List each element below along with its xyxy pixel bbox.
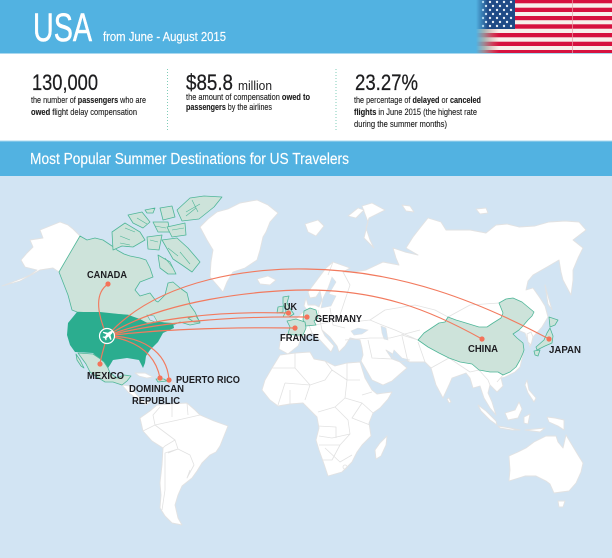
label: Puerto Rico: PUERTO RICO	[176, 375, 240, 386]
stat: delayed or canceled flights: 23.27%	[355, 70, 418, 95]
map: UK and Ireland	[277, 296, 294, 317]
stat: delayed or canceled flights: during the summer months)	[354, 119, 447, 129]
stat: passengers owed compensation: the number of passengers who are	[31, 95, 146, 105]
map: African borders	[272, 353, 373, 462]
icon: US flag	[476, 0, 612, 53]
map: Australia	[509, 435, 583, 507]
map: Africa	[262, 352, 392, 476]
world map	[0, 176, 612, 558]
map: Central America and Caribbean	[122, 373, 175, 405]
header band	[0, 0, 612, 54]
section heading band: Most Popular Summer Destinations for US Travelers	[30, 151, 349, 168]
map: Germany	[303, 308, 318, 326]
stat: passengers owed compensation: 130,000	[32, 70, 98, 95]
map: Japan	[534, 317, 558, 356]
title: USA: USA	[33, 6, 92, 50]
stat: passengers owed compensation	[31, 70, 146, 117]
map: China	[418, 298, 534, 375]
section heading band	[0, 140, 612, 176]
stat: compensation amount: $85.8	[186, 70, 233, 95]
stat: delayed or canceled flights: the percentage of delayed or canceled	[354, 95, 481, 105]
label: France: FRANCE	[280, 333, 319, 344]
map: Hispaniola and Puerto Rico	[156, 379, 167, 382]
map: France	[287, 319, 306, 335]
stat: delayed or canceled flights	[354, 70, 481, 129]
map: South-East Asian islands	[478, 380, 564, 432]
stat: compensation amount: million	[238, 78, 272, 93]
label: Japan: JAPAN	[549, 345, 581, 356]
destination markers	[97, 281, 552, 383]
divider	[335, 69, 337, 131]
map: Eurasia	[279, 203, 586, 415]
map: Greenland and Iceland	[200, 200, 278, 292]
label: China: CHINA	[468, 344, 498, 355]
divider	[166, 69, 168, 131]
label: Mexico: MEXICO	[87, 371, 124, 382]
subtitle: date range: from June - August 2015	[103, 29, 226, 44]
map: Alaska	[2, 222, 80, 300]
map: USA	[67, 312, 174, 368]
icon: airplane hub	[100, 328, 114, 344]
map: Mexico	[76, 353, 131, 385]
stat: compensation amount: passengers by the airlines	[186, 102, 272, 112]
map: Canada	[59, 196, 222, 325]
label: Germany: GERMANY	[315, 314, 362, 325]
label: Dominican Republic	[129, 384, 184, 407]
map: Eurasian borders	[285, 262, 503, 385]
label: Dominican Republic: DOMINICAN	[129, 384, 184, 395]
map: inland seas	[351, 328, 368, 335]
flight arcs	[99, 269, 549, 380]
stat: passengers owed compensation: owed flight delay compensation	[31, 107, 137, 117]
map: Great Lakes	[147, 315, 158, 323]
stat: compensation amount: the amount of compensation owed to	[186, 92, 310, 102]
stat: delayed or canceled flights: flights in June 2015 (the highest rate	[354, 107, 477, 117]
label: Canada: CANADA	[87, 270, 127, 281]
map: South America	[140, 403, 228, 525]
label: UK: UK	[284, 302, 298, 313]
label: Dominican Republic: REPUBLIC	[132, 396, 180, 407]
stat: compensation amount	[186, 70, 310, 112]
map: Korea	[527, 332, 533, 345]
